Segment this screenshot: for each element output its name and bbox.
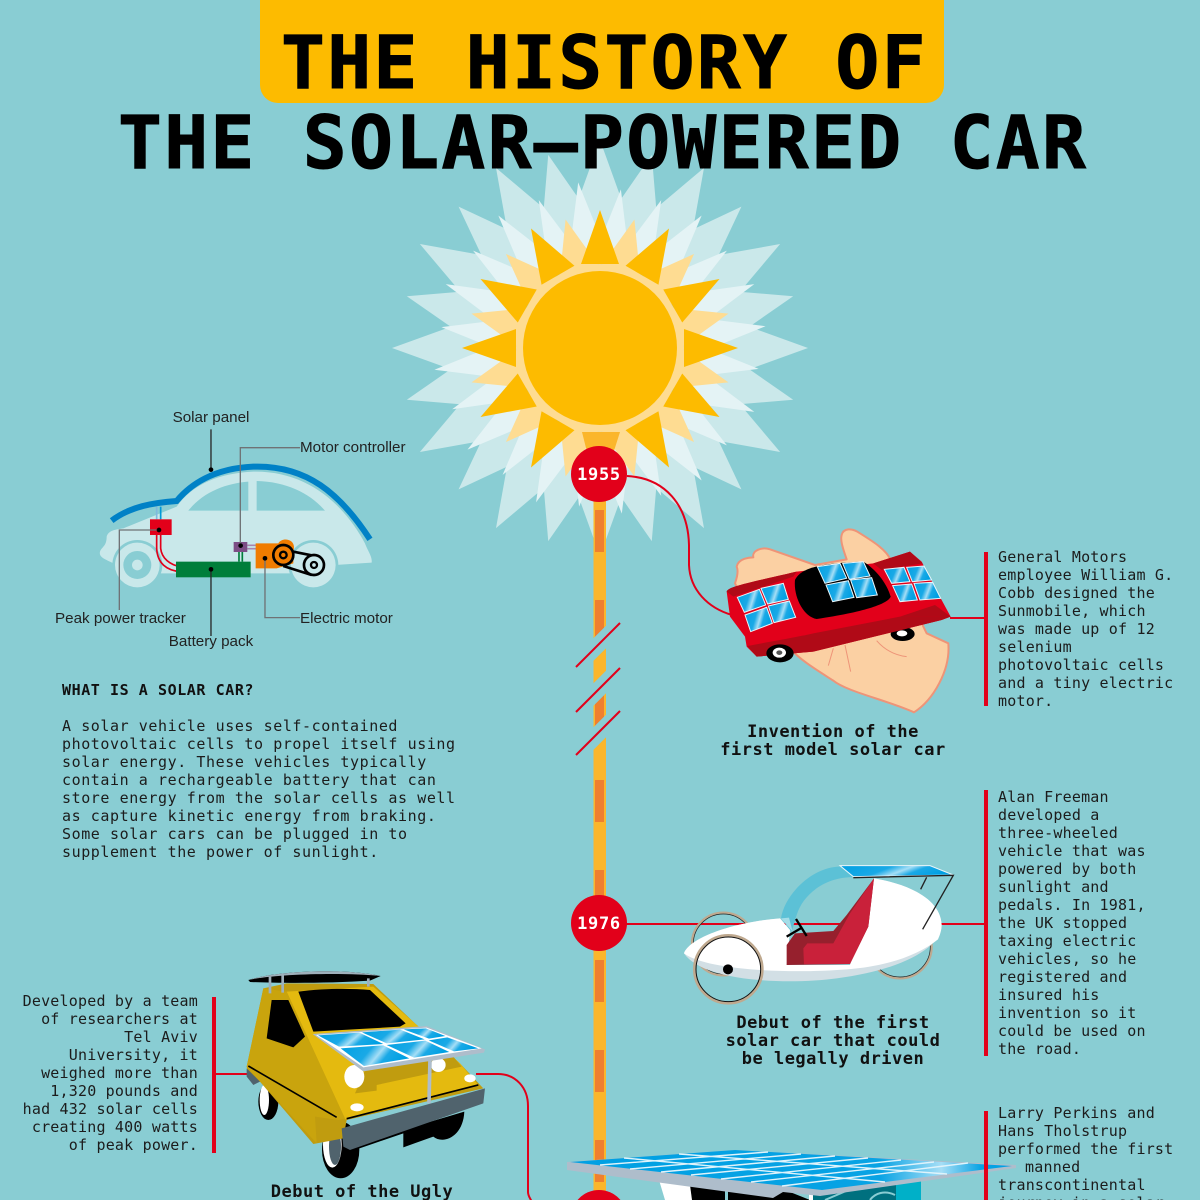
text block: 1955: was made up of 12 <box>998 620 1155 638</box>
text block: 1976: insured his <box>998 986 1100 1004</box>
caption: 1976: be legally driven <box>742 1049 924 1069</box>
year marker 1955 <box>571 446 627 502</box>
text block: transcontinental journey: Hans Tholstrup <box>998 1122 1127 1140</box>
text block: 1976: vehicles, so he <box>998 950 1136 968</box>
label: battery pack: Battery pack <box>169 633 254 650</box>
connector: 1976 <box>625 923 984 925</box>
sun illustration <box>392 140 808 556</box>
front solar panel <box>313 1026 485 1103</box>
illustration: three-wheeled vehicle <box>684 866 953 1003</box>
text block: 1976: vehicle that was <box>998 842 1146 860</box>
text block: 1976: Alan Freeman <box>998 788 1109 806</box>
paragraph: contain a rechargeable battery that can <box>62 771 436 789</box>
body <box>684 878 942 981</box>
car body <box>659 1180 921 1200</box>
paragraph: store energy from the solar cells as well <box>62 789 456 807</box>
text block: what is a solar car <box>62 681 456 861</box>
solar array <box>567 1150 1016 1198</box>
solar car diagram <box>55 409 406 650</box>
text block: 1955: General Motors <box>998 548 1127 566</box>
text block: Ugly Duckling: creating 400 watts <box>32 1118 198 1136</box>
text block: Ugly Duckling: Tel Aviv <box>124 1028 198 1046</box>
windows <box>298 989 406 1032</box>
paragraph: Some solar cars can be plugged in to <box>62 825 408 843</box>
caption: 1976: solar car that could <box>726 1031 940 1051</box>
text block: 1976: developed a <box>998 806 1100 824</box>
year marker 1976 <box>571 895 627 951</box>
text block: transcontinental journey <box>984 1104 1173 1200</box>
caption: 1976 <box>726 1013 940 1069</box>
text block: 1976: sunlight and <box>998 878 1109 896</box>
paragraph: as capture kinetic energy from braking. <box>62 807 436 825</box>
text block: 1976: taxing electric <box>998 932 1136 950</box>
title <box>118 21 1088 186</box>
paragraph: photovoltaic cells to propel itself using <box>62 735 456 753</box>
year marker 1955: 1955 <box>577 465 621 485</box>
text block: 1955 <box>984 548 1173 710</box>
roof panel <box>248 971 381 993</box>
text block: 1976: registered and <box>998 968 1127 986</box>
hand <box>735 529 949 712</box>
canopy <box>781 867 853 932</box>
label: peak power tracker: Peak power tracker <box>55 610 186 627</box>
text block: 1955: motor. <box>998 692 1053 710</box>
timeline break marks <box>576 623 620 755</box>
text block: 1976 <box>984 788 1146 1058</box>
text block: transcontinental journey: Larry Perkins and <box>998 1104 1155 1122</box>
seat <box>787 878 874 965</box>
paragraph: supplement the power of sunlight. <box>62 843 379 861</box>
connector: 1955 <box>627 476 984 618</box>
heading: WHAT IS A SOLAR CAR? <box>62 681 254 699</box>
wheels <box>258 1083 464 1178</box>
diagram artwork <box>100 429 372 636</box>
label: solar panel: Solar panel <box>173 409 249 426</box>
text block: transcontinental journey: performed the first <box>998 1140 1173 1158</box>
text block: Ugly Duckling: had 432 solar cells <box>23 1100 198 1118</box>
title: THE HISTORY OF <box>281 21 928 106</box>
solar roof <box>840 866 953 877</box>
label: motor controller: Motor controller <box>300 439 406 456</box>
label: electric motor: Electric motor <box>300 610 393 627</box>
caption: 1955: first model solar car <box>720 740 946 760</box>
front wheel <box>694 935 762 1003</box>
hood shading <box>355 1057 462 1093</box>
illustration: race solar car <box>567 1150 1016 1200</box>
bumper <box>247 1068 485 1150</box>
steering <box>787 919 807 937</box>
text block: 1976: pedals. In 1981, <box>998 896 1146 914</box>
title banner <box>260 0 944 103</box>
year marker 1976: 1976 <box>577 914 621 934</box>
text block: 1955: photovoltaic cells <box>998 656 1164 674</box>
text block: Ugly Duckling <box>23 992 216 1154</box>
text block: 1955: and a tiny electric <box>998 674 1173 692</box>
text block: 1976: could be used on <box>998 1022 1146 1040</box>
text block: Ugly Duckling: University, it <box>69 1046 198 1064</box>
text block: 1955: Cobb designed the <box>998 584 1155 602</box>
headlights <box>344 1058 476 1111</box>
rear wheels <box>692 913 932 978</box>
model car <box>727 552 951 662</box>
front body <box>287 987 478 1119</box>
text block: Ugly Duckling: of peak power. <box>69 1136 198 1154</box>
text block: 1976: invention so it <box>998 1004 1136 1022</box>
caption: 1955: Invention of the <box>747 722 919 742</box>
text block: 1976: the road. <box>998 1040 1081 1058</box>
text block: 1976: three-wheeled <box>998 824 1118 842</box>
paragraph: solar energy. These vehicles typically <box>62 753 427 771</box>
text block: 1955: employee William G. <box>998 566 1173 584</box>
text block: transcontinental journey: transcontinental <box>998 1176 1146 1194</box>
illustration: yellow car <box>247 971 485 1178</box>
text block: 1955: Sunmobile, which <box>998 602 1146 620</box>
paragraph: A solar vehicle uses self-contained <box>62 717 398 735</box>
caption: 1976: Debut of the first <box>736 1013 930 1033</box>
side and rear body <box>247 983 483 1144</box>
caption: 1955 <box>720 722 946 760</box>
connector: 1979 car <box>216 1074 532 1200</box>
trim lines <box>248 1066 478 1119</box>
text block: Ugly Duckling: 1,320 pounds and <box>50 1082 198 1100</box>
text block: 1976: powered by both <box>998 860 1136 878</box>
text block: Ugly Duckling: Developed by a team <box>23 992 198 1010</box>
timeline bar <box>582 432 620 1200</box>
paragraph <box>62 717 456 861</box>
text block: transcontinental journey: manned <box>1025 1158 1080 1176</box>
text block: Ugly Duckling: of researchers at <box>41 1010 198 1028</box>
text block: Ugly Duckling: weighed more than <box>41 1064 198 1082</box>
illustration: hand holding model car <box>727 529 951 712</box>
year marker partial <box>571 1190 627 1200</box>
text block: 1976: the UK stopped <box>998 914 1127 932</box>
text block: 1955: selenium <box>998 638 1072 656</box>
title: THE SOLAR–POWERED CAR <box>118 101 1088 186</box>
